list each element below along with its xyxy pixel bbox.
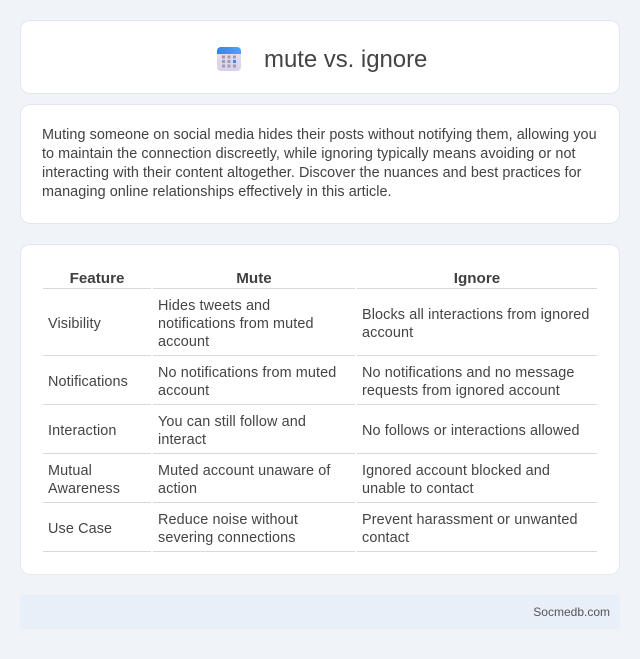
row: mutual awareness [48, 463, 550, 497]
row: use case [48, 512, 578, 546]
text: account [158, 383, 209, 399]
text: Visibility [48, 316, 101, 332]
text: interacting with their content altogether. Discover the nuances and best practices for [42, 165, 582, 181]
text: requests from ignored account [362, 383, 560, 399]
text: Blocks all interactions from ignored [362, 307, 589, 323]
text: Mutual [48, 463, 92, 479]
text: account [362, 325, 413, 341]
table header [70, 270, 500, 287]
title card [20, 20, 620, 94]
row: interaction [48, 414, 580, 448]
text: Muting someone on social media hides their posts without notifying them, allowing you [42, 127, 597, 143]
text: Prevent harassment or unwanted [362, 512, 578, 528]
text: Reduce noise without [158, 512, 298, 528]
text: interact [158, 432, 206, 448]
text: contact [362, 530, 409, 546]
table card [20, 244, 620, 575]
text: Awareness [48, 481, 120, 497]
text: Muted account unaware of [158, 463, 330, 479]
text: account [158, 334, 209, 350]
icon: calendar [217, 47, 241, 71]
footer bar [20, 595, 620, 629]
text: Ignore [454, 270, 500, 287]
text: Use Case [48, 521, 112, 537]
text: Feature [70, 270, 124, 287]
text: Notifications [48, 374, 128, 390]
text: You can still follow and [158, 414, 306, 430]
text: severing connections [158, 530, 296, 546]
text: No notifications from muted [158, 365, 336, 381]
text: action [158, 481, 197, 497]
footer text: Socmedb.com [533, 605, 610, 619]
row: visibility [48, 298, 589, 350]
row: notifications [48, 365, 575, 399]
title: mute vs. ignore [264, 46, 427, 73]
intro card [20, 104, 620, 224]
text: notifications from muted [158, 316, 314, 332]
text: to maintain the connection discreetly, while ignoring typically means avoiding or not [42, 146, 576, 162]
intro text [42, 127, 597, 200]
text: Ignored account blocked and [362, 463, 550, 479]
text: Mute [236, 270, 272, 287]
text: Interaction [48, 423, 117, 439]
text: No notifications and no message [362, 365, 575, 381]
text: Hides tweets and [158, 298, 270, 314]
text: unable to contact [362, 481, 474, 497]
text: managing online relationships effectively in this article. [42, 184, 392, 200]
text: No follows or interactions allowed [362, 423, 580, 439]
